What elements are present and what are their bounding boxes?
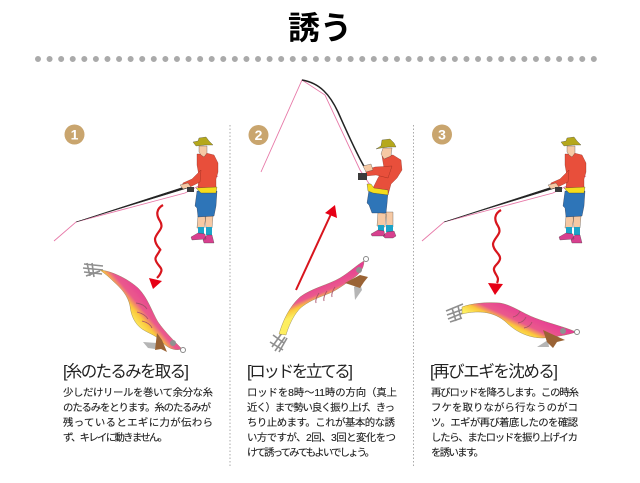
body text 1: のたるみをとります。糸のたるみが — [63, 401, 212, 414]
body text 3 — [431, 386, 579, 459]
panel: step 1 — [54, 124, 218, 444]
step number 2: 2 — [255, 127, 263, 143]
wavy red arrow down — [149, 205, 163, 289]
heading 1: [糸のたるみを取る] — [63, 362, 189, 381]
body text 1: 少しだけリールを巻いて余分な糸 — [63, 386, 213, 399]
body text 1: ず、キレイに動きません。 — [63, 431, 168, 444]
illustration: angler lowering rod — [422, 137, 586, 243]
squid jig 3 — [446, 303, 580, 348]
body text 3: 再びロッドを降ろします。この時糸 — [431, 386, 579, 399]
body text 3: を誘います。 — [431, 446, 484, 459]
body text 2: い方ですが、2回、3回と変化をつ — [247, 431, 396, 444]
body text 1 — [63, 386, 213, 444]
squid jig 2 — [270, 256, 368, 352]
illustration: angler with lowered rod — [54, 137, 218, 243]
body text 2: ロッドを8時～11時の方向（真上 — [247, 386, 397, 399]
heading 3: [再びエギを沈める] — [430, 362, 558, 381]
squid jig 1 — [83, 263, 186, 352]
body text 2: けて誘ってみてもよいでしょう。 — [247, 446, 375, 459]
heading 2: [ロッドを立てる] — [247, 362, 353, 381]
body text 3: したら、またロッドを振り上げイカ — [431, 431, 578, 444]
title: 誘う — [288, 10, 352, 46]
body text 2 — [247, 386, 397, 459]
panel: step 3 — [422, 124, 586, 459]
panel: step 2 — [247, 80, 402, 459]
step number 1: 1 — [71, 126, 79, 142]
step number 3 — [432, 124, 452, 144]
illustration: angler with raised rod — [261, 80, 402, 238]
body text 2: 近く）まで勢い良く振り上げ、きっ — [247, 401, 395, 414]
straight red arrow up — [296, 205, 337, 290]
body text 2: ちり止めます。これが基本的な誘 — [247, 416, 396, 429]
body text 1: 残っているとエギに力が伝わら — [63, 416, 213, 429]
body text 3: ツ。エギが再び着底したのを確認 — [431, 416, 579, 429]
step number 3: 3 — [438, 126, 446, 142]
step number 1 — [64, 124, 84, 144]
wavy red arrow down — [488, 210, 503, 295]
body text 3: フケを取りながら行なうのがコ — [431, 401, 578, 414]
step number 2 — [248, 125, 268, 145]
